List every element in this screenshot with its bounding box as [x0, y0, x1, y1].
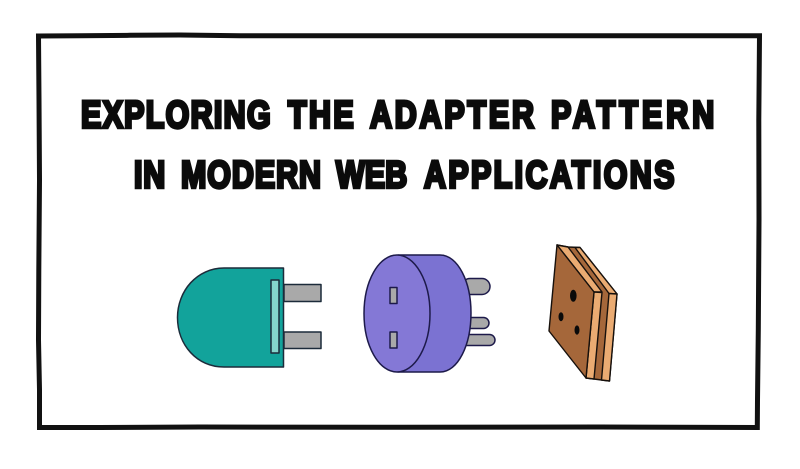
- title: IN: [134, 154, 165, 196]
- icon: teal two-pin plug: [178, 268, 321, 367]
- title: ADAPTER: [370, 94, 534, 136]
- title: EXPLORING: [81, 94, 271, 136]
- title: [81, 94, 714, 196]
- title: MODERN: [181, 154, 321, 196]
- icon: purple adapter: [364, 255, 495, 372]
- title: APPLICATIONS: [424, 154, 674, 196]
- title: WEB: [336, 154, 407, 196]
- title: THE: [288, 94, 354, 136]
- title: PATTERN: [551, 94, 714, 136]
- icon: brown socket: [549, 245, 617, 381]
- hand-drawn frame: [38, 35, 760, 428]
